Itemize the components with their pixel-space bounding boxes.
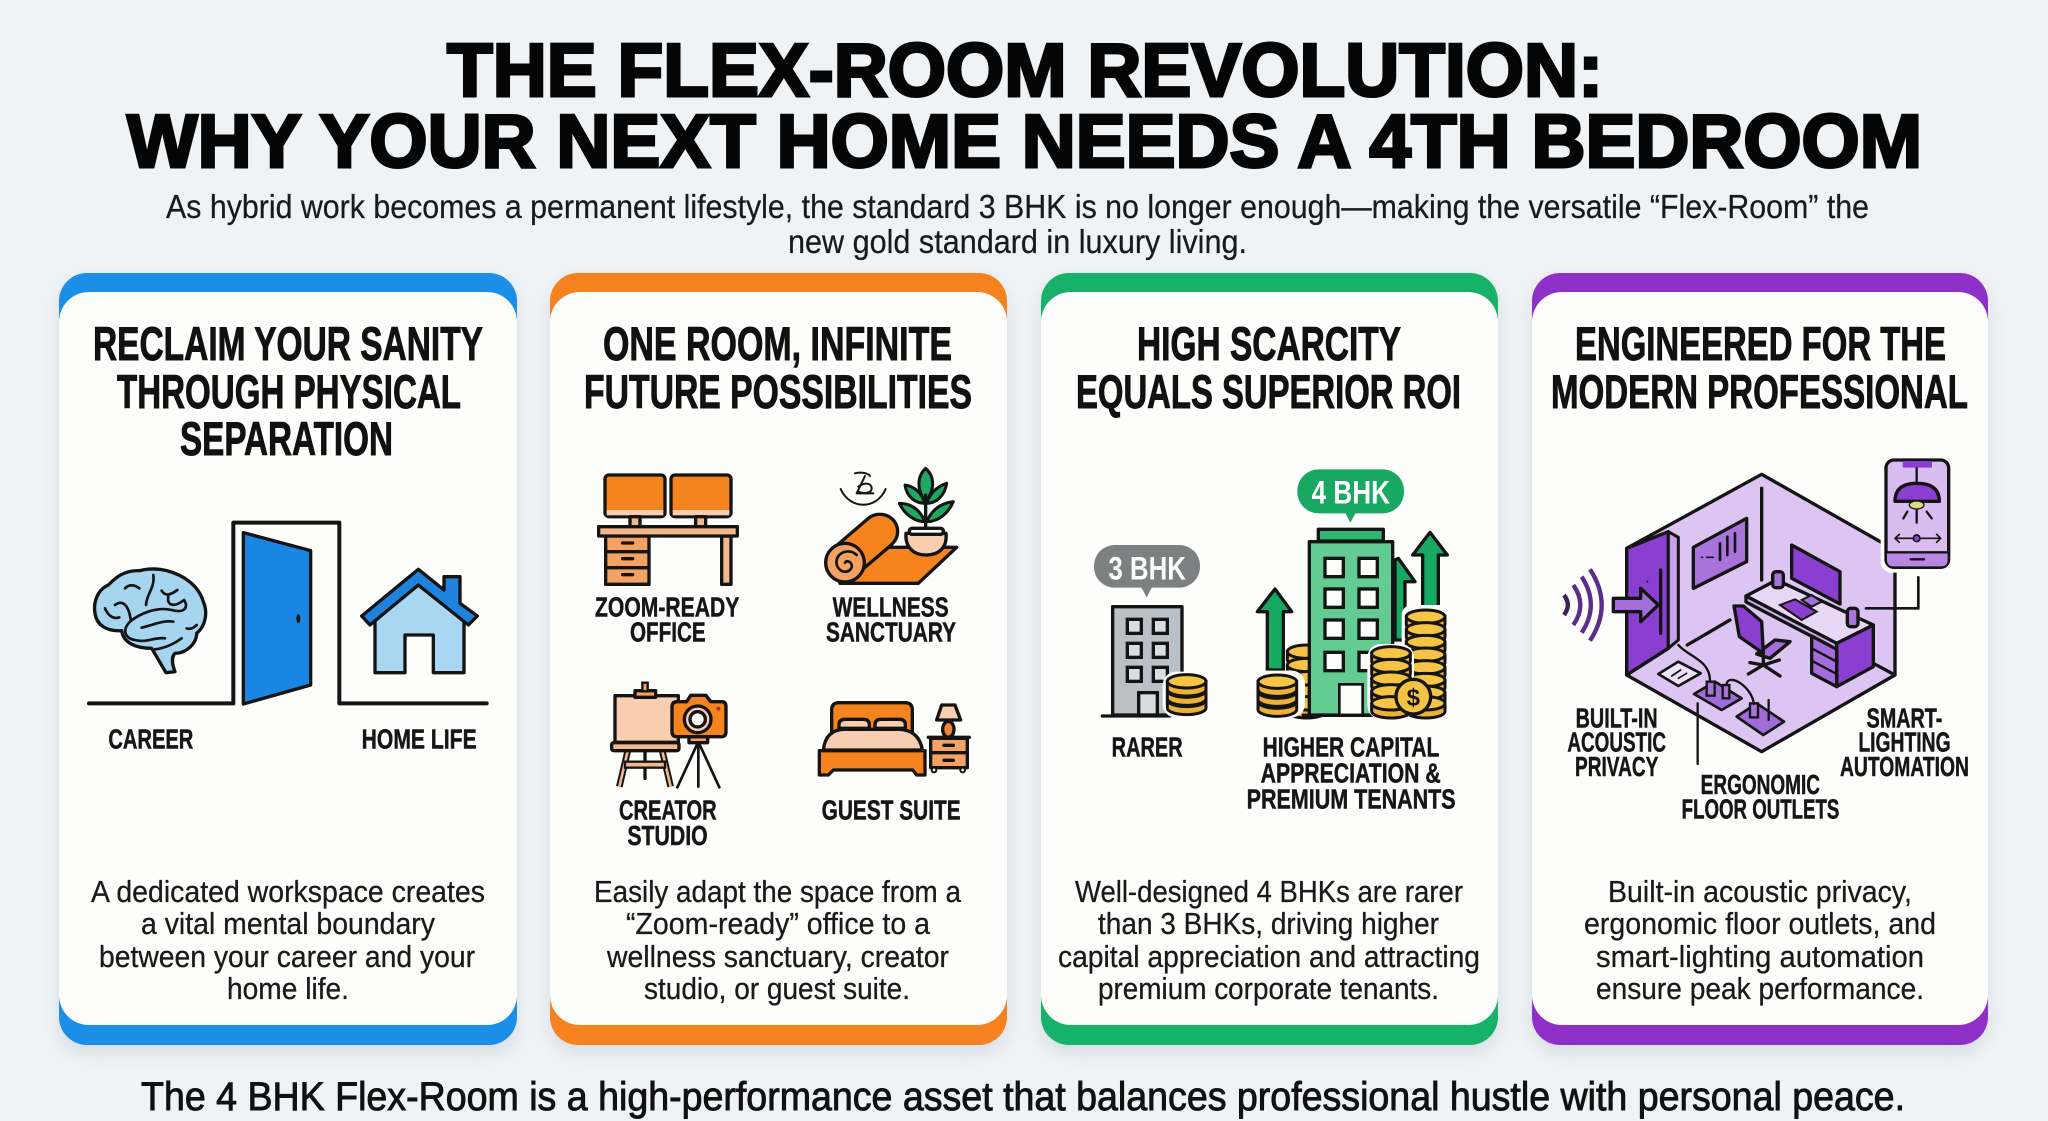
subtitle: new gold standard in luxury living.: [788, 223, 1247, 260]
icon: guest suite: GUEST SUITE: [822, 794, 961, 825]
label: ergonomic floor outlets: [1682, 769, 1839, 824]
icon: zoom-ready office: OFFICE: [630, 617, 706, 648]
icon: open door: [243, 533, 311, 704]
label: smart-lighting automation: LIGHTING: [1858, 727, 1951, 758]
heading: reclaim: THROUGH PHYSICAL: [117, 365, 461, 418]
label: built-in acoustic privacy: ACOUSTIC: [1567, 727, 1666, 758]
icon: floor outlets: [1658, 645, 1784, 764]
heading: engineered: [1551, 317, 1968, 418]
heading: one room: FUTURE POSSIBILITIES: [584, 365, 972, 418]
body: engineered: [1584, 874, 1936, 1006]
icon: house: [362, 569, 477, 673]
title: WHY YOUR NEXT HOME NEEDS A 4TH BEDROOM: [127, 99, 1922, 183]
body: one room: Easily adapt the space from a: [594, 874, 962, 909]
icon: 3 BHK building: RARER: [1112, 732, 1183, 763]
title: THE FLEX-ROOM REVOLUTION:: [447, 28, 1603, 112]
icon: 4 BHK building with growth: 4 BHK: [1312, 475, 1390, 511]
label: smart-lighting automation: [1840, 702, 1969, 782]
heading: high scarcity: [1076, 317, 1461, 418]
heading: high scarcity: EQUALS SUPERIOR ROI: [1076, 365, 1461, 418]
body: reclaim: home life.: [227, 971, 349, 1006]
label: ergonomic floor outlets: FLOOR OUTLETS: [1682, 793, 1839, 824]
label: built-in acoustic privacy: BUILT-IN: [1576, 702, 1658, 733]
icon: 4 BHK building with growth: HIGHER CAPITAL: [1263, 732, 1439, 763]
panel: reclaim your sanity: [59, 273, 517, 1053]
icon: zoom-ready office: ZOOM-READY: [595, 592, 740, 623]
body: reclaim: [91, 874, 485, 1006]
chart: 3 BHK vs 4 BHK: [1094, 469, 1456, 814]
icon: 3 BHK building: [1094, 545, 1211, 763]
label: home life: HOME LIFE: [362, 723, 477, 754]
icon: 3 BHK building: 3 BHK: [1108, 550, 1186, 586]
body: engineered: smart-lighting automation: [1596, 939, 1924, 974]
subtitle: As hybrid work becomes a permanent lifestyle, the standard 3 BHK is no longer enough—making the versatile “Flex-Room” the: [166, 188, 1869, 225]
icon: brain: [95, 569, 206, 673]
heading: one room: [584, 317, 972, 418]
body: one room: studio, or guest suite.: [644, 971, 910, 1006]
icon: 4 BHK building with growth: PREMIUM TENANTS: [1247, 783, 1456, 814]
icon: creator studio: [612, 683, 726, 851]
label: built-in acoustic privacy: [1567, 702, 1666, 782]
label: ergonomic floor outlets: ERGONOMIC: [1701, 769, 1820, 800]
body: one room: wellness sanctuary, creator: [606, 939, 949, 974]
label: built-in acoustic privacy: PRIVACY: [1575, 751, 1659, 782]
body: high scarcity: than 3 BHKs, driving higher: [1098, 906, 1439, 941]
subtitle: [166, 188, 1869, 260]
panel: engineered for the modern professional: [1532, 273, 1988, 1053]
label: smart-lighting automation: AUTOMATION: [1840, 751, 1969, 782]
icon: creator studio: CREATOR: [619, 794, 717, 825]
icon: desk, monitor and chair: [1734, 545, 1873, 687]
icon: brain, door and house: [89, 523, 487, 754]
heading: one room: ONE ROOM, INFINITE: [603, 317, 952, 370]
body: engineered: ensure peak performance.: [1596, 971, 1924, 1006]
icon: 4 BHK building with growth: APPRECIATION &: [1261, 758, 1441, 789]
heading: reclaim: RECLAIM YOUR SANITY: [93, 317, 483, 370]
body: one room: “Zoom-ready” office to a: [626, 906, 931, 941]
icon: wellness sanctuary: [826, 468, 957, 648]
body: reclaim: A dedicated workspace creates: [91, 874, 485, 909]
heading: high scarcity: HIGH SCARCITY: [1137, 317, 1401, 370]
icon: wellness sanctuary: SANCTUARY: [826, 617, 956, 648]
icon: sound waves and arrow: [1564, 569, 1658, 641]
body: engineered: ergonomic floor outlets, and: [1584, 906, 1936, 941]
body: high scarcity: [1058, 874, 1480, 1006]
heading: reclaim: [93, 317, 483, 465]
icon: 4 BHK building with growth: $: [1407, 684, 1420, 711]
body: high scarcity: Well-designed 4 BHKs are rarer: [1075, 874, 1463, 909]
icon grid: four uses: [595, 468, 969, 851]
body: high scarcity: premium corporate tenants.: [1098, 971, 1439, 1006]
label: smart-lighting automation: SMART-: [1867, 702, 1942, 733]
panel: high scarcity superior roi: [1041, 273, 1498, 1053]
icon: guest suite: [819, 703, 969, 825]
icon: isometric smart room: [1564, 456, 1969, 824]
icon: wellness sanctuary: WELLNESS: [833, 592, 949, 623]
panel: one room infinite possibilities: [550, 273, 1007, 1053]
heading: reclaim: SEPARATION: [180, 412, 393, 465]
icon: room shell: [1627, 474, 1895, 752]
footer takeaway: The 4 BHK Flex-Room is a high-performance asset that balances professional hustle with personal peace.: [141, 1075, 1905, 1119]
body: reclaim: a vital mental boundary: [141, 906, 435, 941]
body: engineered: Built-in acoustic privacy,: [1608, 874, 1912, 909]
body: one room: [594, 874, 962, 1006]
title: [127, 28, 1922, 183]
icon: creator studio: STUDIO: [627, 820, 708, 851]
body: reclaim: between your career and your: [99, 939, 475, 974]
body: high scarcity: capital appreciation and attracting: [1058, 939, 1480, 974]
icon: smart-lighting phone: [1866, 456, 1953, 673]
icon: wall and doorway: [89, 523, 487, 703]
icon: zoom-ready office: [595, 475, 740, 648]
icon: 4 BHK building with growth: [1247, 469, 1456, 814]
label: career: CAREER: [108, 723, 193, 754]
